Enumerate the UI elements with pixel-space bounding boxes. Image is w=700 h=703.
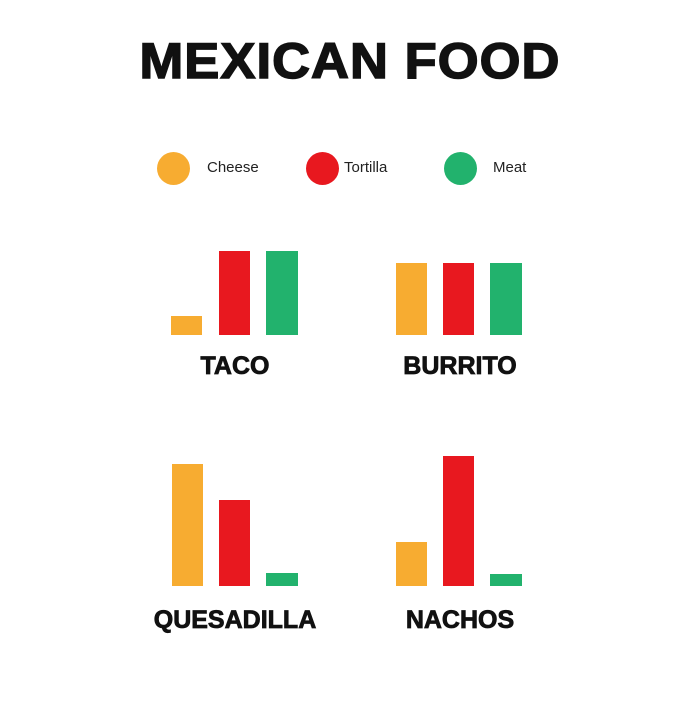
chart: taco [171,251,298,380]
chart: quesadilla [154,464,316,634]
legend: Cheese [207,159,259,176]
legend: tortilla [306,152,388,185]
label: nachos: NACHOS [406,606,514,634]
chart: burrito [396,263,522,380]
legend: cheese [157,152,259,185]
label: taco: TACO [200,352,269,380]
chart: nachos [396,456,522,634]
legend [157,152,526,185]
legend: Tortilla [344,159,387,176]
legend: Meat [493,159,526,176]
title: MEXICAN FOOD [140,33,560,89]
label: quesadilla: QUESADILLA [154,606,316,634]
legend: meat [444,152,526,185]
label: burrito: BURRITO [403,352,517,380]
